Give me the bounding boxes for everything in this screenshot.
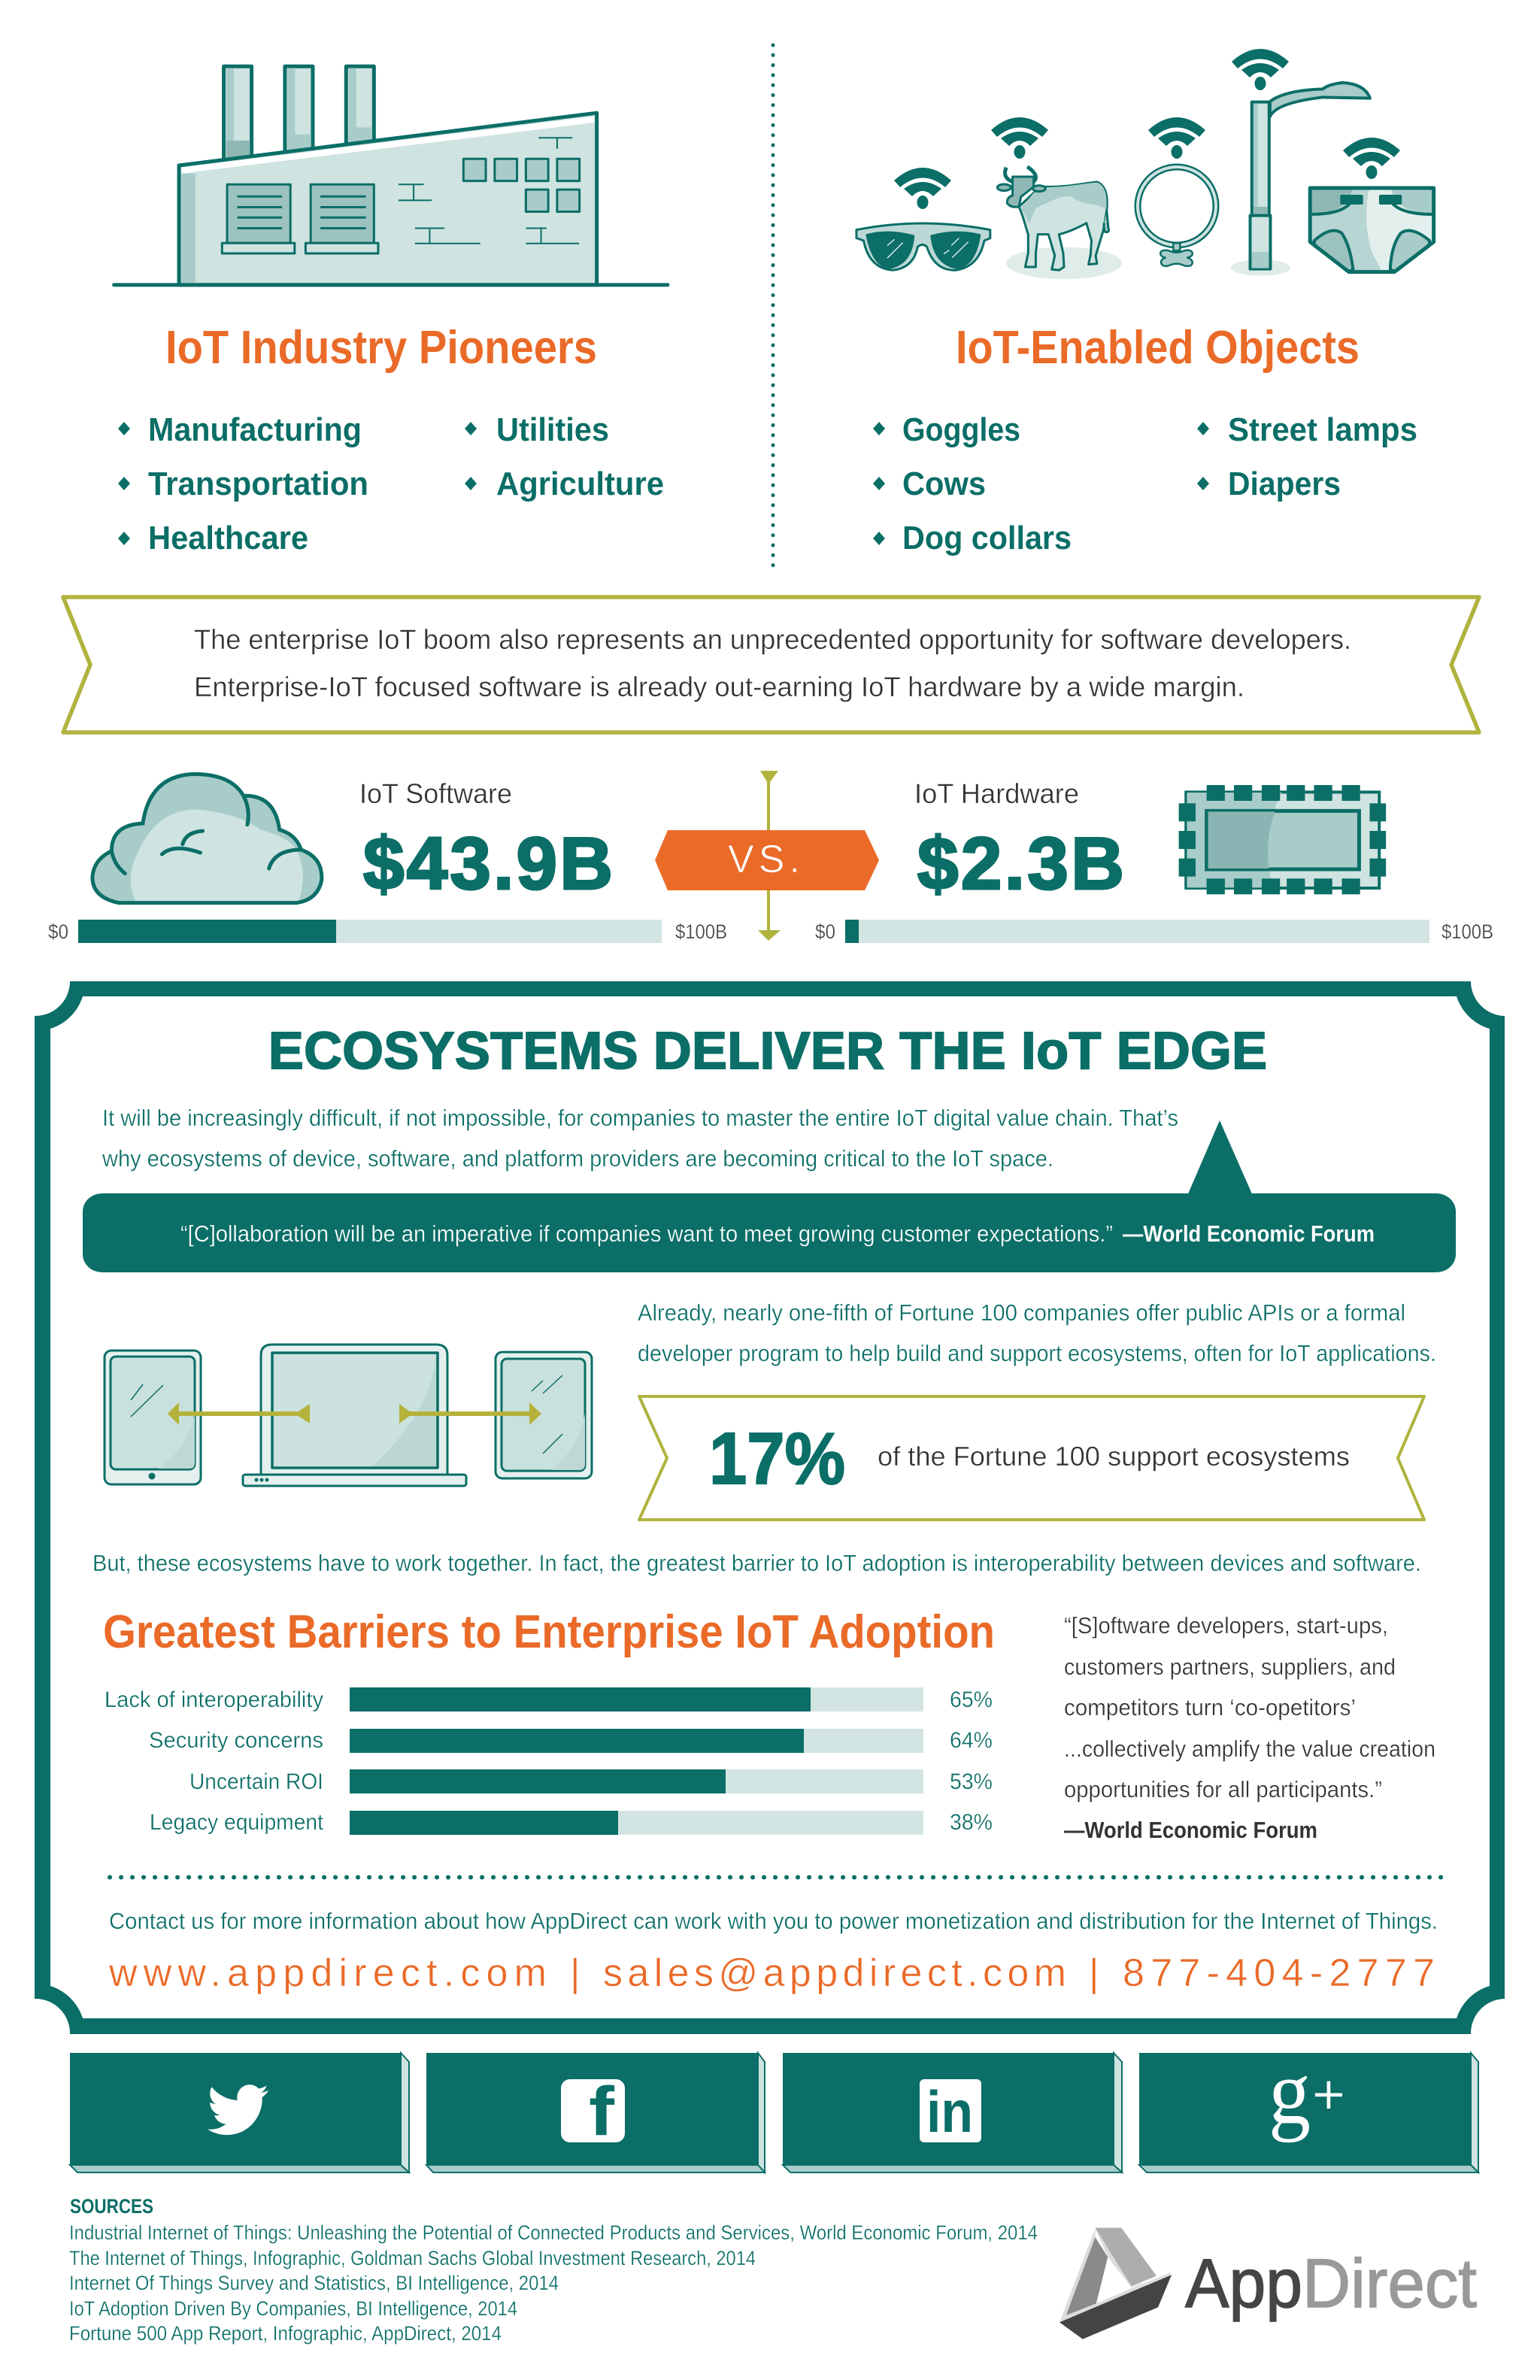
quote: co-opetitors: “[S]oftware developers, start-ups,	[1064, 1612, 1388, 1639]
text: fortune 100 paragraph: Already, nearly one-fifth of Fortune 100 companies offer public APIs or a formal	[638, 1299, 1405, 1326]
bar: uncertain ROI 53%: 53%	[950, 1769, 993, 1794]
text: interoperability sentence: But, these ecosystems have to work together. In fact, the greatest barrier to IoT adoption is interoperability between devices and software.	[92, 1550, 1421, 1576]
list: industries: Utilities	[496, 411, 609, 448]
bar: uncertain ROI 53%	[189, 1769, 993, 1794]
sources: Fortune 500 App Report, Infographic, AppDirect, 2014	[69, 2322, 502, 2345]
icon: connected devices	[105, 1345, 592, 1486]
quote: co-opetitors: opportunities for all participants.”	[1064, 1776, 1382, 1802]
list: industries: Healthcare	[148, 520, 308, 556]
label: IoT Hardware: IoT Hardware	[914, 778, 1079, 809]
bar: lack of interoperability 65%: 65%	[950, 1687, 993, 1712]
logo mark	[1060, 2228, 1172, 2339]
button: linkedin: in	[926, 2078, 973, 2145]
sources: Internet Of Things Survey and Statistics, BI Intelligence, 2014	[69, 2272, 559, 2294]
badge: VS: V S .	[728, 838, 800, 881]
list: objects: Dog collars	[902, 520, 1072, 556]
bar chart: barriers to adoption	[105, 1687, 993, 1835]
sources: IoT Adoption Driven By Companies, BI Intelligence, 2014	[69, 2297, 517, 2320]
bar: uncertain ROI 53%: Uncertain ROI	[189, 1769, 323, 1794]
button: twitter	[70, 2053, 409, 2172]
icon: sunglasses with wifi	[856, 168, 990, 270]
sources: The Internet of Things, Infographic, Goldman Sachs Global Investment Research, 2014	[69, 2247, 756, 2269]
callout: WEF quote	[83, 1120, 1456, 1272]
list: industries: Manufacturing	[148, 411, 362, 448]
bar: security concerns 64%: Security concerns	[149, 1728, 323, 1753]
text: contact prompt: Contact us for more information about how AppDirect can work with you to power monetization and distribution for the Internet of Things.	[109, 1908, 1438, 1934]
text: intro paragraph: It will be increasingly difficult, if not impossible, for companies to master the entire IoT digital value chain. That’s	[102, 1105, 1178, 1131]
heading: greatest barriers: Greatest Barriers to Enterprise IoT Adoption	[103, 1606, 995, 1658]
list: industries	[118, 411, 664, 556]
callout: WEF quote: “[C]ollaboration will be an imperative if companies want to meet growing customer expectations.”	[180, 1220, 1113, 1247]
heading: IoT-Enabled Objects: IoT-Enabled Objects	[956, 322, 1360, 374]
list: objects: Street lamps	[1228, 411, 1417, 448]
quote: co-opetitors: —World Economic Forum	[1064, 1817, 1317, 1843]
logo: AppDirect	[1060, 2228, 1477, 2339]
text: contact details: |	[570, 1951, 581, 1995]
bar: legacy equipment 38%	[150, 1810, 993, 1835]
text: intro paragraph	[102, 1105, 1178, 1172]
text: contact details	[108, 1951, 1435, 1995]
label: IoT Software: IoT Software	[359, 778, 512, 809]
sources	[69, 2195, 1038, 2345]
text: fortune 100 paragraph: developer program to help build and support ecosystems, often for IoT applications.	[638, 1340, 1436, 1366]
arrow: vs vertical line	[758, 771, 781, 941]
panel: IoT industry pioneers	[114, 66, 668, 556]
callout: 17% stat: of the Fortune 100 support ecosystems	[878, 1441, 1350, 1472]
bar: security concerns 64%	[149, 1728, 993, 1753]
bar: hardware revenue: $0	[815, 920, 835, 943]
callout banner: software opportunity: Enterprise-IoT focused software is already out-earning IoT hardware by a wide margin.	[194, 672, 1244, 702]
button: google plus: +	[1312, 2063, 1345, 2127]
text: contact details: 877-404-2777	[1123, 1951, 1435, 1995]
bar: hardware revenue: $100B	[1441, 920, 1493, 943]
callout: 17% stat: 17%	[709, 1417, 845, 1499]
bar: software revenue: $0	[48, 920, 68, 943]
icon: cow with wifi	[991, 117, 1122, 279]
button: linkedin	[783, 2053, 1122, 2172]
icon: factory	[114, 66, 668, 285]
icon: diaper with wifi	[1310, 138, 1434, 272]
list: industries: Agriculture	[496, 465, 664, 502]
quote: co-opetitors: customers partners, suppliers, and	[1064, 1654, 1396, 1680]
text: fortune 100 paragraph	[638, 1299, 1436, 1366]
text: contact details: |	[1089, 1951, 1099, 1995]
icon: dog collar with wifi	[1138, 117, 1216, 266]
logo: AppDirect: Direct	[1302, 2245, 1477, 2322]
quote: co-opetitors: competitors turn ‘co-opetitors’	[1064, 1694, 1356, 1721]
list: objects: Cows	[902, 465, 986, 502]
icon: street lamp with wifi	[1231, 49, 1370, 276]
list: objects	[873, 411, 1417, 556]
text: intro paragraph: why ecosystems of device, software, and platform providers are becoming critical to the IoT space.	[102, 1145, 1053, 1172]
sources: Industrial Internet of Things: Unleashing the Potential of Connected Products and Services, World Economic Forum, 2014	[69, 2221, 1038, 2244]
quote: co-opetitors	[1064, 1612, 1435, 1843]
sources: SOURCES	[70, 2195, 153, 2218]
badge: VS	[655, 830, 879, 890]
list: objects: Diapers	[1228, 465, 1341, 502]
quote: co-opetitors: ...collectively amplify the value creation	[1064, 1736, 1435, 1762]
logo wordmark: App	[1185, 2245, 1302, 2322]
icon: chip	[1179, 785, 1386, 894]
heading: IoT Industry Pioneers: IoT Industry Pioneers	[165, 322, 597, 374]
callout banner: software opportunity	[63, 597, 1479, 732]
bar: legacy equipment 38%: Legacy equipment	[150, 1810, 324, 1835]
panel frame	[35, 981, 1505, 2034]
bar: security concerns 64%: 64%	[950, 1728, 993, 1753]
bar: hardware revenue	[815, 920, 1493, 943]
button: google plus	[1139, 2042, 1478, 2172]
callout banner: software opportunity: The enterprise IoT boom also represents an unprecedented opportunity for software developers.	[194, 624, 1351, 655]
bar: lack of interoperability 65%	[105, 1687, 993, 1712]
text: contact details: www.appdirect.com	[108, 1951, 547, 1995]
heading: ecosystems: ECOSYSTEMS DELIVER THE IoT EDGE	[268, 1021, 1267, 1080]
panel: IoT-enabled objects	[856, 49, 1434, 556]
bar: software revenue	[48, 920, 727, 943]
button: facebook: f	[589, 2073, 614, 2150]
value: $43.9B: $43.9B	[363, 822, 613, 905]
bar: legacy equipment 38%: 38%	[950, 1810, 993, 1835]
bar: software revenue: $100B	[675, 920, 727, 943]
button: facebook	[426, 2053, 765, 2172]
button: google plus: g	[1269, 2042, 1311, 2143]
value: $2.3B: $2.3B	[917, 822, 1124, 905]
text: contact details: sales@appdirect.com	[603, 1951, 1066, 1995]
panel: software vs hardware comparison	[48, 771, 1493, 943]
icon: cloud	[92, 774, 322, 903]
bar: lack of interoperability 65%: Lack of interoperability	[105, 1687, 323, 1712]
list: objects: Goggles	[902, 411, 1020, 448]
panel: ecosystems deliver the IoT edge	[35, 981, 1505, 2034]
callout: WEF quote: —World Economic Forum	[1123, 1220, 1375, 1247]
callout: 17% stat	[639, 1396, 1424, 1520]
list: industries: Transportation	[148, 465, 368, 502]
